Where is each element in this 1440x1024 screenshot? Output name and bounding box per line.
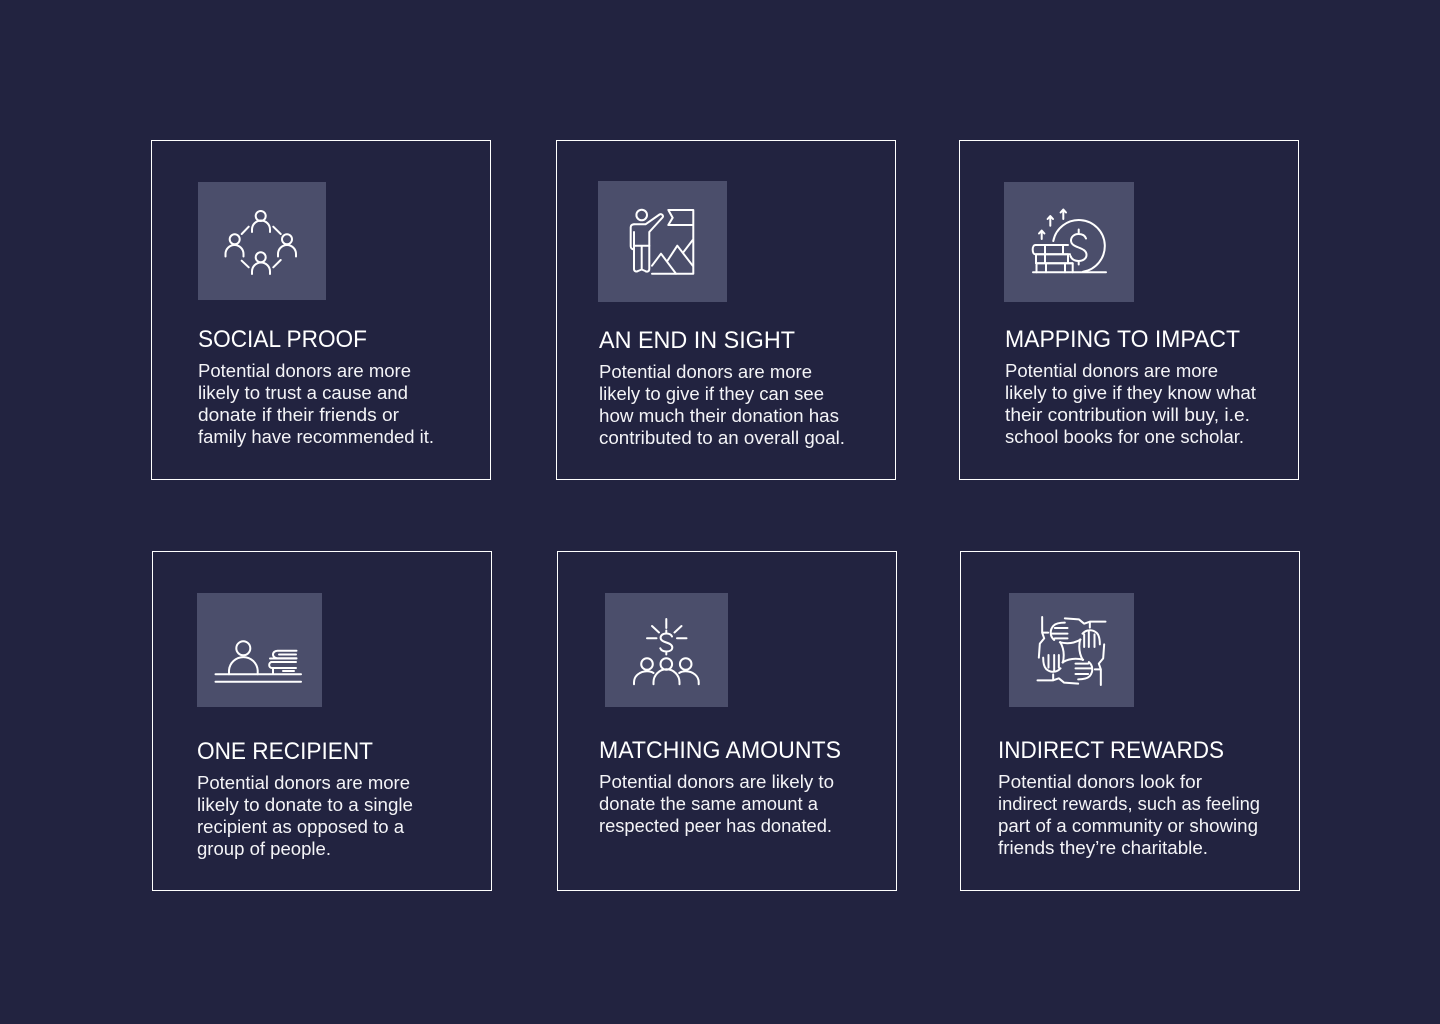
text block: social proof: donate if their friends or: [198, 405, 399, 425]
text block: one recipient: likely to donate to a single: [197, 795, 413, 815]
heading: social proof: SOCIAL PROOF: [198, 326, 367, 353]
heading: indirect rewards: INDIRECT REWARDS: [998, 737, 1224, 764]
heading: one recipient: ONE RECIPIENT: [197, 738, 373, 765]
text block: indirect rewards: indirect rewards, such as feeling: [998, 794, 1260, 814]
text block: social proof: [198, 361, 434, 447]
text block: indirect rewards: Potential donors look for: [998, 772, 1202, 792]
text block: an end in sight: contributed to an overall goal.: [599, 428, 845, 448]
text block: one recipient: group of people.: [197, 839, 331, 859]
text block: indirect rewards: [998, 772, 1260, 858]
text block: matching amounts: respected peer has donated.: [599, 816, 832, 836]
text block: social proof: family have recommended it.: [198, 427, 434, 447]
panel: matching amounts: [558, 552, 896, 890]
text block: social proof: likely to trust a cause and: [198, 383, 408, 403]
text block: an end in sight: likely to give if they can see: [599, 384, 824, 404]
icon: coin stacks and rising arrows: [1033, 210, 1106, 272]
text block: matching amounts: donate the same amount a: [599, 794, 819, 814]
text block: one recipient: [197, 773, 413, 859]
text block: an end in sight: how much their donation has: [599, 406, 839, 426]
panel: one recipient: [152, 552, 492, 890]
icon: person at desk with books: [216, 641, 301, 682]
panel: mapping to impact: [960, 140, 1298, 480]
panel: social proof: [152, 140, 490, 480]
icon: network of people: [226, 211, 296, 274]
text block: social proof: Potential donors are more: [198, 361, 411, 381]
panel: indirect rewards: [960, 552, 1300, 890]
icon: four interlocking hands: [1038, 617, 1105, 685]
text block: matching amounts: Potential donors are likely to: [599, 772, 834, 792]
text block: mapping to impact: likely to give if they know what: [1005, 383, 1256, 403]
text block: an end in sight: [599, 362, 845, 448]
text block: indirect rewards: friends they’re charitable.: [998, 838, 1208, 858]
text block: indirect rewards: part of a community or showing: [998, 816, 1258, 836]
text block: mapping to impact: Potential donors are more: [1005, 361, 1218, 381]
panel: an end in sight: [556, 140, 896, 480]
heading: an end in sight: AN END IN SIGHT: [599, 327, 795, 354]
icon: people under a shining dollar: [634, 619, 699, 684]
text block: mapping to impact: school books for one scholar.: [1005, 427, 1244, 447]
text block: an end in sight: Potential donors are more: [599, 362, 812, 382]
text block: matching amounts: [599, 772, 834, 836]
heading: mapping to impact: MAPPING TO IMPACT: [1005, 326, 1240, 353]
icon: person pointing at goal flag: [631, 210, 693, 274]
heading: matching amounts: MATCHING AMOUNTS: [599, 737, 841, 764]
text block: mapping to impact: their contribution will buy, i.e.: [1005, 405, 1250, 425]
text block: one recipient: Potential donors are more: [197, 773, 410, 793]
text block: mapping to impact: [1005, 361, 1256, 447]
text block: one recipient: recipient as opposed to a: [197, 817, 405, 837]
